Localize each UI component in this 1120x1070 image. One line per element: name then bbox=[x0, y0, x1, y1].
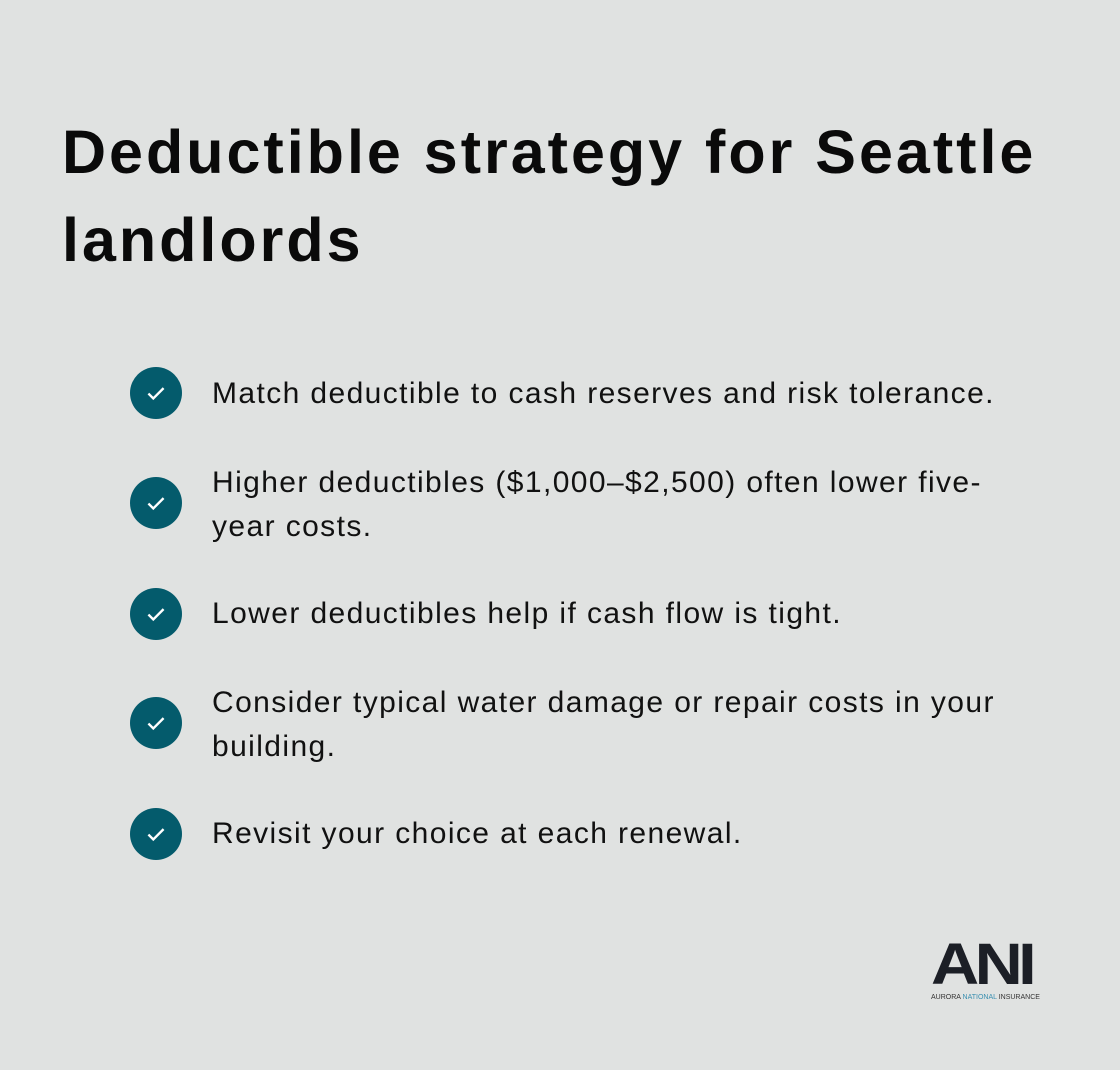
text: Consider typical water damage or repair costs in your building. bbox=[212, 686, 995, 763]
item 2 bbox=[130, 466, 982, 543]
text: Lower deductibles help if cash flow is tight. bbox=[212, 597, 842, 630]
logo: ANI bbox=[931, 932, 1032, 997]
icon: check bbox=[130, 697, 182, 749]
item 3 bbox=[130, 588, 842, 640]
icon: check bbox=[130, 477, 182, 529]
title: Deductible strategy for Seattle landlords bbox=[62, 118, 1036, 274]
icon: check bbox=[130, 367, 182, 419]
text: Revisit your choice at each renewal. bbox=[212, 817, 743, 850]
logo: AURORA NATIONAL INSURANCE bbox=[931, 994, 1040, 1001]
item 4 bbox=[130, 686, 995, 763]
item 5 bbox=[130, 808, 743, 860]
icon: check bbox=[130, 588, 182, 640]
text: Higher deductibles ($1,000–$2,500) often lower five-year costs. bbox=[212, 466, 982, 543]
item 1 bbox=[130, 367, 995, 419]
icon: check bbox=[130, 808, 182, 860]
text: Match deductible to cash reserves and risk tolerance. bbox=[212, 377, 995, 410]
